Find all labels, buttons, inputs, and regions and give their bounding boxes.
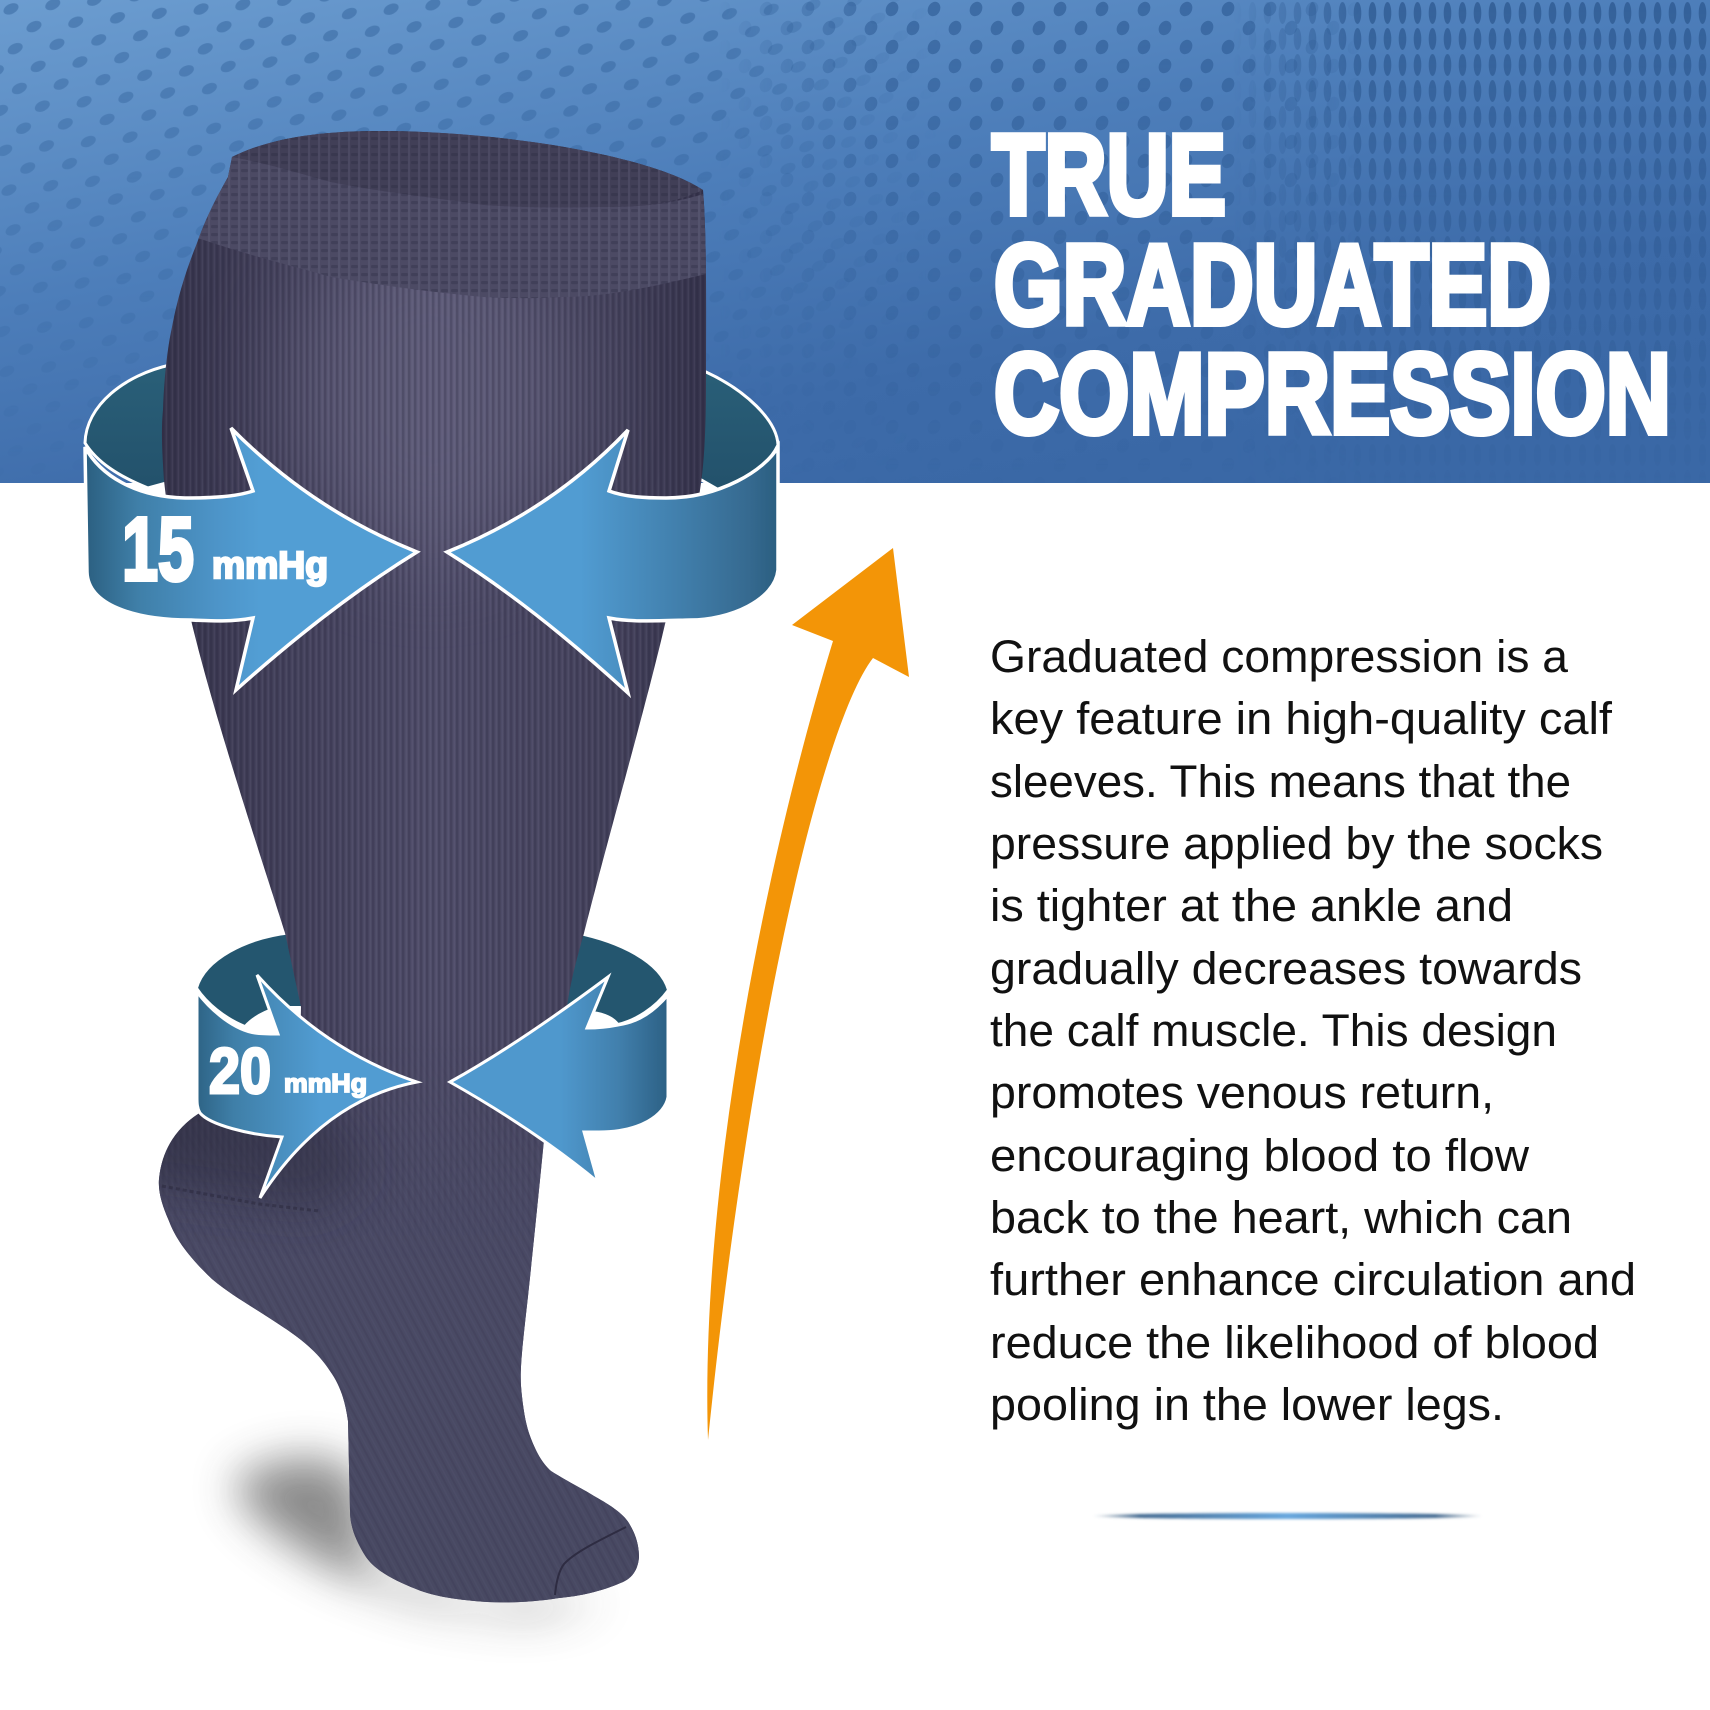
label: 15 mmHg [122, 500, 328, 600]
body text block [990, 631, 1636, 1430]
sock ground shadow [235, 1458, 610, 1615]
label: 15 mmHg: mmHg [212, 545, 328, 587]
label: 20 mmHg [209, 1035, 367, 1107]
left arrow [85, 428, 417, 690]
body text block: gradually decreases towards [990, 943, 1582, 994]
right arrow [447, 430, 778, 693]
left arrow [197, 975, 417, 1198]
band 20 mmHg: back of ring [197, 933, 668, 1026]
band 15 mmHg: back of ring [85, 365, 778, 490]
right arrow [450, 977, 668, 1182]
label: 15 mmHg: 15 [122, 500, 194, 600]
band 15 mmHg: front arrows [85, 428, 778, 693]
body text block: is tighter at the ankle and [990, 880, 1513, 931]
toe seam [555, 1527, 626, 1595]
compression sock [130, 120, 720, 1610]
sock inner opening [232, 131, 703, 207]
body text block: Graduated compression is a [990, 631, 1569, 682]
body text block: reduce the likelihood of blood [990, 1317, 1599, 1368]
label: 20 mmHg: 20 [209, 1035, 271, 1107]
body text block: promotes venous return, [990, 1067, 1494, 1118]
body text block: encouraging blood to flow [990, 1130, 1530, 1181]
label: 20 mmHg: mmHg [284, 1068, 367, 1098]
blue divider line [1092, 1513, 1484, 1519]
body text block: the calf muscle. This design [990, 1005, 1557, 1056]
sock cuff [180, 150, 710, 298]
body text block: back to the heart, which can [990, 1192, 1572, 1243]
body text block: pressure applied by the socks [990, 818, 1603, 869]
band 20 mmHg: front arrows [197, 975, 668, 1198]
body text block: further enhance circulation and [990, 1254, 1636, 1305]
title [992, 112, 1671, 458]
header background band [0, 0, 1710, 483]
body text block: key feature in high-quality calf [990, 693, 1613, 744]
title: TRUE [992, 112, 1226, 239]
title: GRADUATED [994, 222, 1551, 349]
sock body [130, 120, 720, 1610]
body text block: sleeves. This means that the [990, 756, 1571, 807]
body text block: pooling in the lower legs. [990, 1379, 1504, 1430]
orange upward arrow [707, 548, 909, 1440]
